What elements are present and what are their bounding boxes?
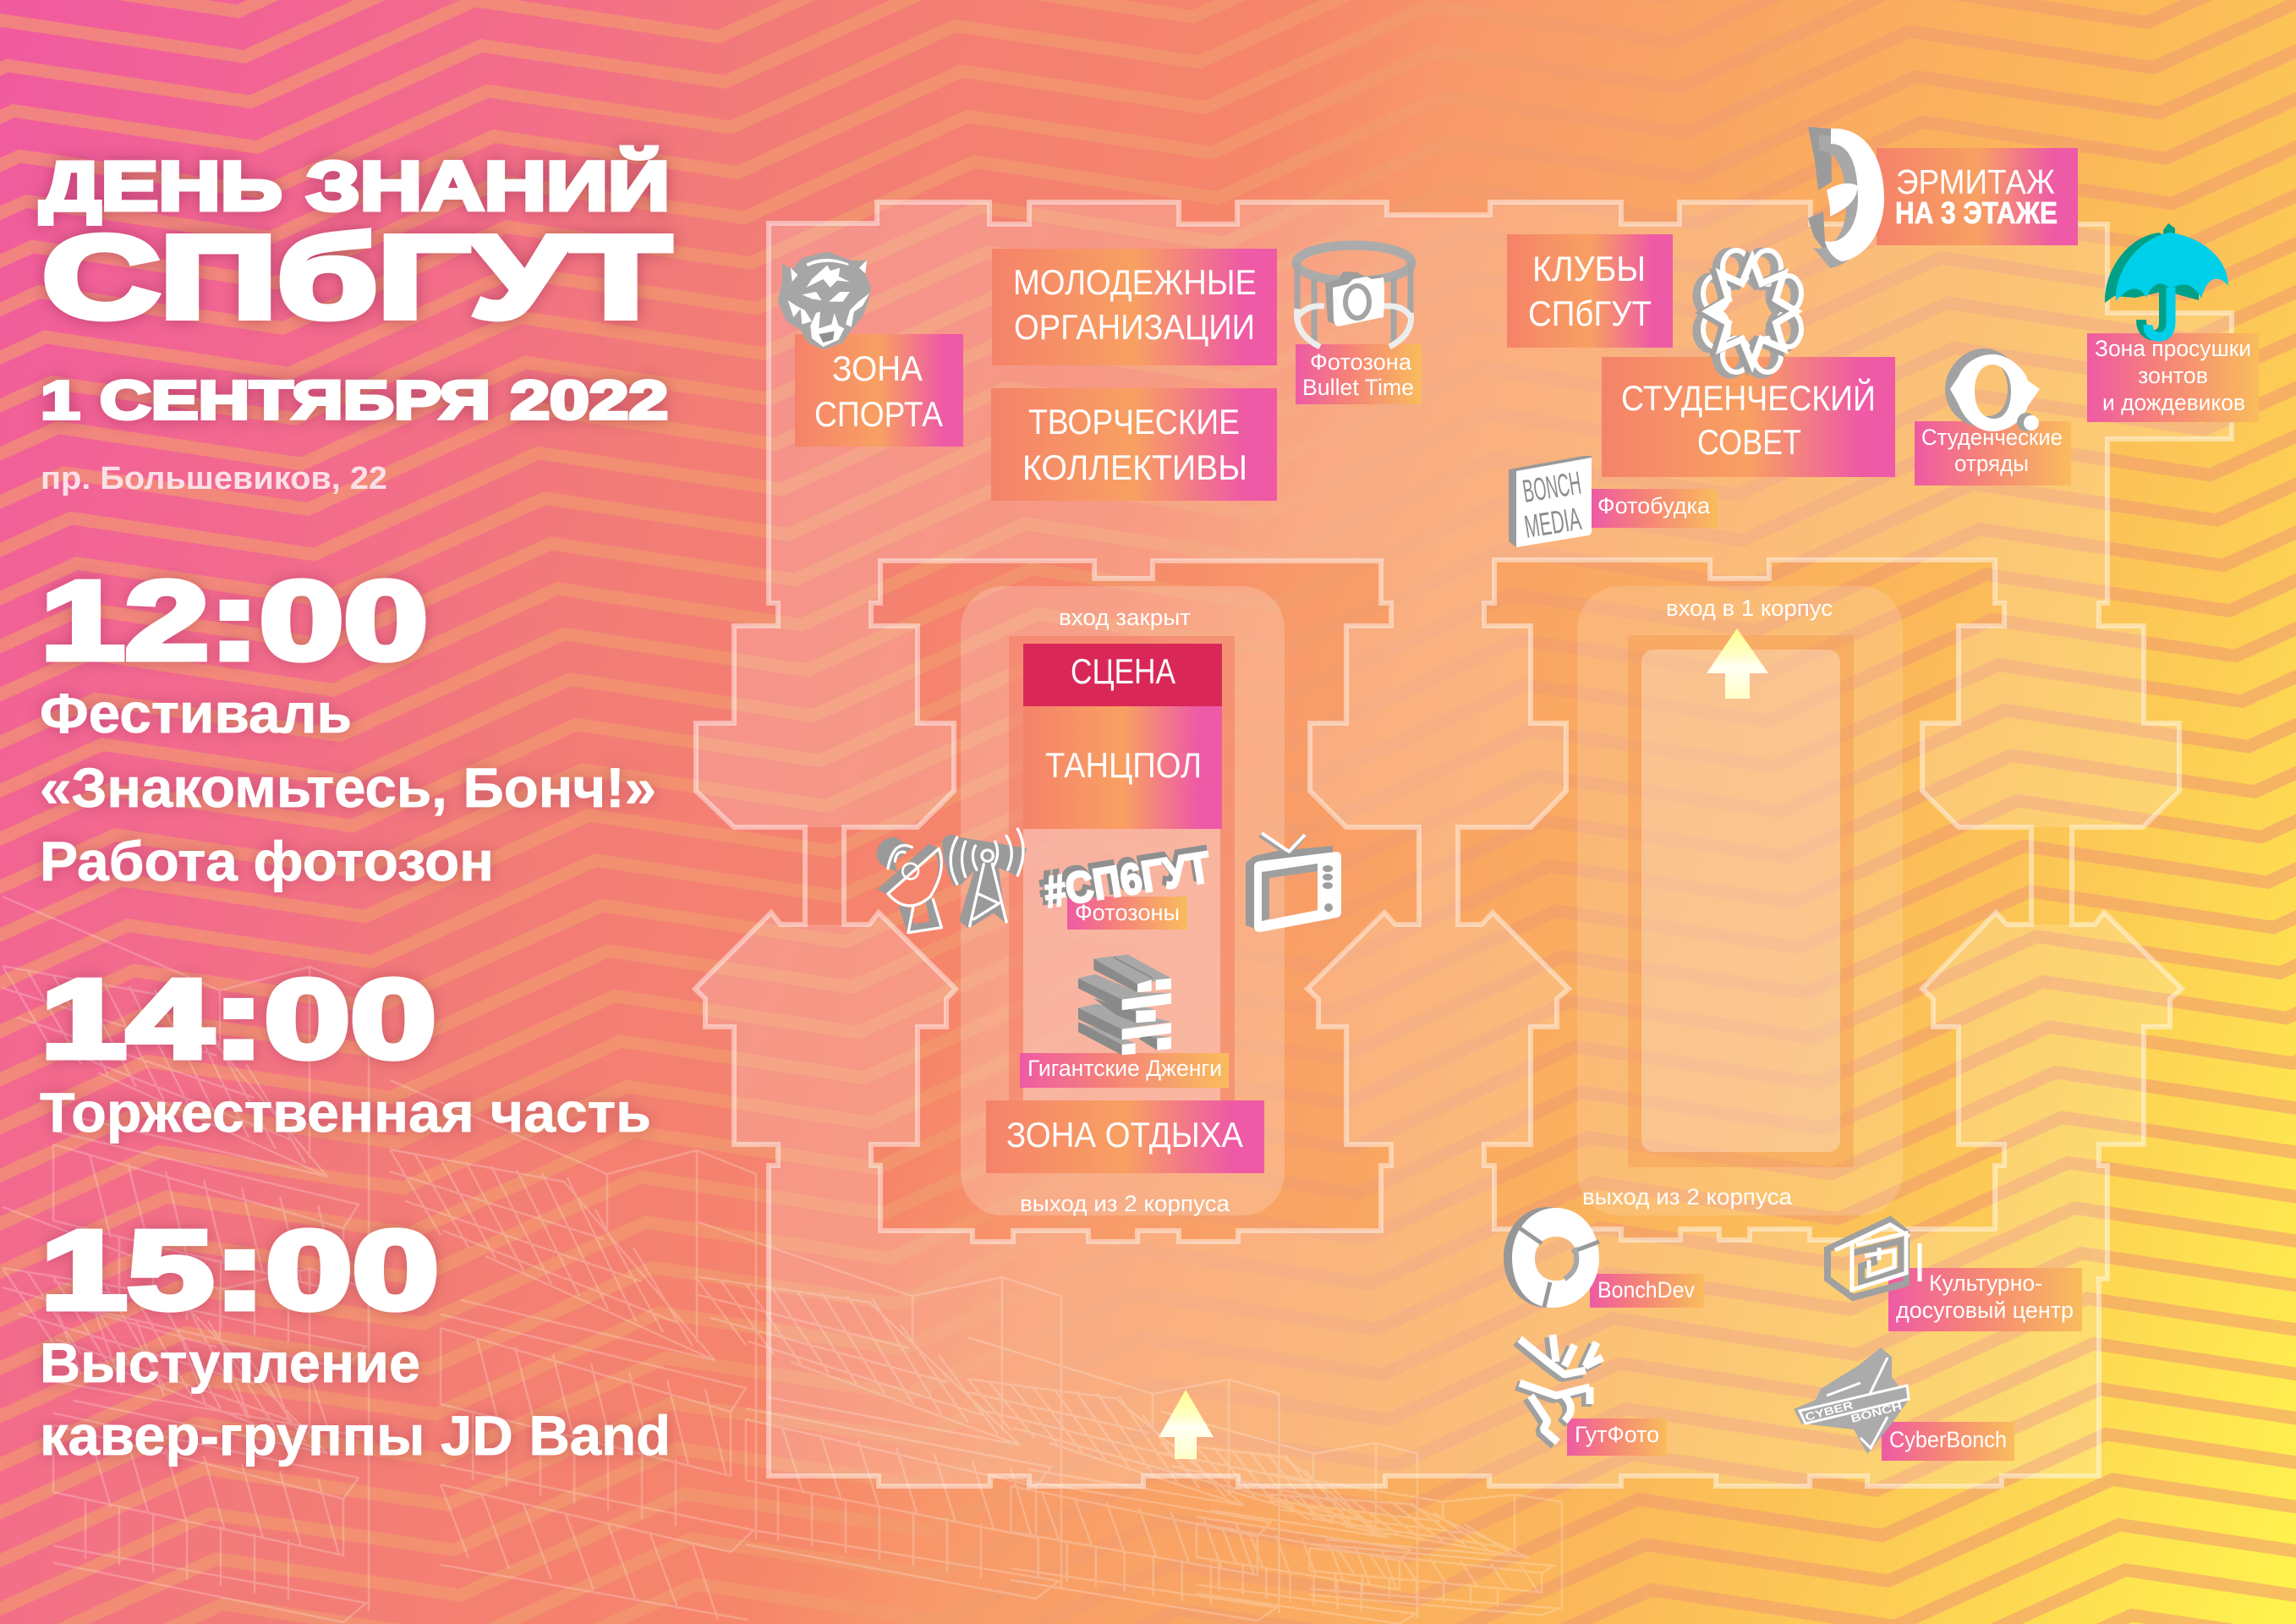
label: photo booth	[1592, 489, 1718, 528]
time 14:00: 14:00	[41, 957, 436, 1081]
label: gutphoto: ГутФото	[1575, 1422, 1659, 1447]
icon: umbrella	[2105, 223, 2228, 337]
label: cyberbonch: CyberBonch	[1889, 1427, 2007, 1452]
text: exit left: выход из 2 корпуса	[1020, 1191, 1230, 1216]
label: creative groups	[991, 388, 1277, 501]
text: performance: Выступление	[40, 1331, 420, 1394]
label: umbrella drying zone: зонтов	[2138, 363, 2208, 388]
label: sport zone: ЗОНА	[832, 348, 923, 388]
label: creative groups: КОЛЛЕКТИВЫ	[1022, 447, 1247, 487]
icon: hashtag sticker: #СП6ГУТ	[1041, 843, 1214, 918]
icon: tv	[1246, 833, 1341, 932]
label: giant jenga	[1020, 1053, 1229, 1088]
zone: stage	[1023, 644, 1222, 706]
label: bullet time photozone: Фотозона	[1310, 349, 1412, 375]
label: sport zone: СПОРТА	[814, 394, 943, 434]
label: umbrella drying zone	[2087, 333, 2259, 422]
icon: student squads ring	[1945, 348, 2040, 431]
text: exit right: выход из 2 корпуса	[1582, 1184, 1793, 1210]
label: clubs: СПбГУТ	[1528, 294, 1652, 333]
zone: stage: СЦЕНА	[1071, 651, 1175, 691]
label: giant jenga: Гигантские Дженги	[1027, 1056, 1222, 1081]
right courtyard outline	[1458, 560, 2031, 1240]
icon: bonch media	[1509, 456, 1592, 547]
text: entrance to building 1: вход в 1 корпус	[1666, 595, 1833, 621]
icon: council flower	[1697, 250, 1801, 374]
right yard light field	[1641, 650, 1840, 1152]
schedule	[40, 558, 671, 1467]
icon: hashtag sticker: #СП6ГУТ	[1037, 838, 1212, 914]
heading: university: СПбГУТ	[42, 212, 671, 343]
label: youth organizations: МОЛОДЕЖНЫЕ	[1013, 262, 1257, 302]
label: photozones	[1067, 897, 1187, 930]
icon: bullet time camera rig	[1296, 245, 1411, 347]
label: culture center	[1888, 1268, 2082, 1331]
label: photozones: Фотозоны	[1075, 900, 1180, 925]
heading: day of knowledge: ДЕНЬ ЗНАНИЙ	[40, 147, 670, 225]
icon: griffin	[1516, 1335, 1603, 1445]
time 15:00: 15:00	[41, 1208, 439, 1332]
left courtyard outline	[844, 561, 1419, 1242]
icon: cyberbonch: CYBER	[1804, 1398, 1855, 1424]
icon: bonchdev ring	[1504, 1207, 1599, 1308]
label: hermitage: ЭРМИТАЖ	[1896, 162, 2055, 201]
zone: dance floor	[1023, 706, 1222, 829]
text: festival: Фестиваль	[40, 682, 352, 744]
label: hermitage: НА 3 ЭТАЖЕ	[1895, 195, 2058, 230]
label: bonchdev: BonchDev	[1597, 1277, 1695, 1303]
text: ceremony: Торжественная часть	[40, 1081, 651, 1144]
left yard rounded zone	[961, 586, 1285, 1215]
text: entrance closed: вход закрыт	[1059, 605, 1191, 630]
icon: bonch media: MEDIA	[1522, 502, 1584, 546]
text: cover band: кавер-группы JD Band	[40, 1404, 671, 1467]
label: youth organizations	[992, 249, 1277, 365]
date: 1 СЕНТЯБРЯ 2022	[41, 370, 668, 431]
building footprint fill	[695, 202, 2232, 1486]
outer walls outline	[695, 202, 2232, 1486]
floor plan	[695, 202, 2232, 1486]
arrow: main entrance	[1159, 1390, 1214, 1459]
left yard light field	[1023, 829, 1220, 1100]
label: student squads	[1915, 421, 2071, 486]
zone: rest: ЗОНА ОТДЫХА	[1006, 1115, 1243, 1155]
title block	[40, 147, 671, 431]
icon: antenna and tower	[877, 829, 1026, 933]
label: culture center: досуговый центр	[1896, 1298, 2074, 1323]
icon: cyberbonch: BONCH	[1849, 1399, 1904, 1425]
label: photo booth: Фотобудка	[1597, 493, 1711, 518]
label: youth organizations: ОРГАНИЗАЦИИ	[1014, 307, 1255, 347]
label: student squads: Студенческие	[1921, 425, 2063, 450]
right yard rounded zone	[1577, 586, 1903, 1215]
label: student council	[1602, 357, 1895, 477]
text: photozones: Работа фотозон	[40, 830, 494, 892]
label: creative groups: ТВОРЧЕСКИЕ	[1028, 402, 1240, 442]
label: bonchdev	[1590, 1274, 1704, 1308]
address: пр. Большевиков, 22	[41, 461, 387, 497]
label: bullet time photozone: Bullet Time	[1302, 375, 1414, 400]
label: umbrella drying zone: Зона просушки	[2095, 336, 2251, 361]
label: bullet time photozone	[1296, 344, 1422, 404]
background building line drawing	[3, 897, 1562, 1624]
label: clubs	[1507, 234, 1673, 348]
zone: dance floor: ТАНЦПОЛ	[1045, 745, 1202, 785]
label: clubs: КЛУБЫ	[1532, 249, 1646, 288]
label: gutphoto	[1567, 1418, 1667, 1456]
icon: tiger	[778, 251, 871, 349]
label: student council: СОВЕТ	[1697, 422, 1801, 462]
icon: culture center	[1827, 1220, 1920, 1298]
label: umbrella drying zone: и дождевиков	[2102, 390, 2245, 415]
label: student council: СТУДЕНЧЕСКИЙ	[1621, 377, 1876, 418]
icon: giant jenga	[1078, 954, 1171, 1055]
icon: hermitage logo	[1808, 127, 1884, 268]
label: culture center: Культурно-	[1929, 1270, 2042, 1296]
right yard strip	[1628, 635, 1854, 1167]
arrow: entrance to building 1	[1707, 628, 1768, 699]
label: student squads: отряды	[1954, 451, 2029, 476]
left yard event strip	[1009, 636, 1235, 1100]
label: sport zone	[795, 334, 963, 447]
text: festival name: «Знакомьтесь, Бонч!»	[40, 756, 656, 819]
label: cyberbonch	[1882, 1422, 2014, 1461]
zone: rest	[986, 1100, 1264, 1173]
time 12:00: 12:00	[41, 558, 428, 683]
icon: cyberbonch	[1794, 1347, 1909, 1454]
icon: bonch media: BONCH	[1521, 466, 1584, 510]
label: hermitage	[1877, 148, 2078, 245]
